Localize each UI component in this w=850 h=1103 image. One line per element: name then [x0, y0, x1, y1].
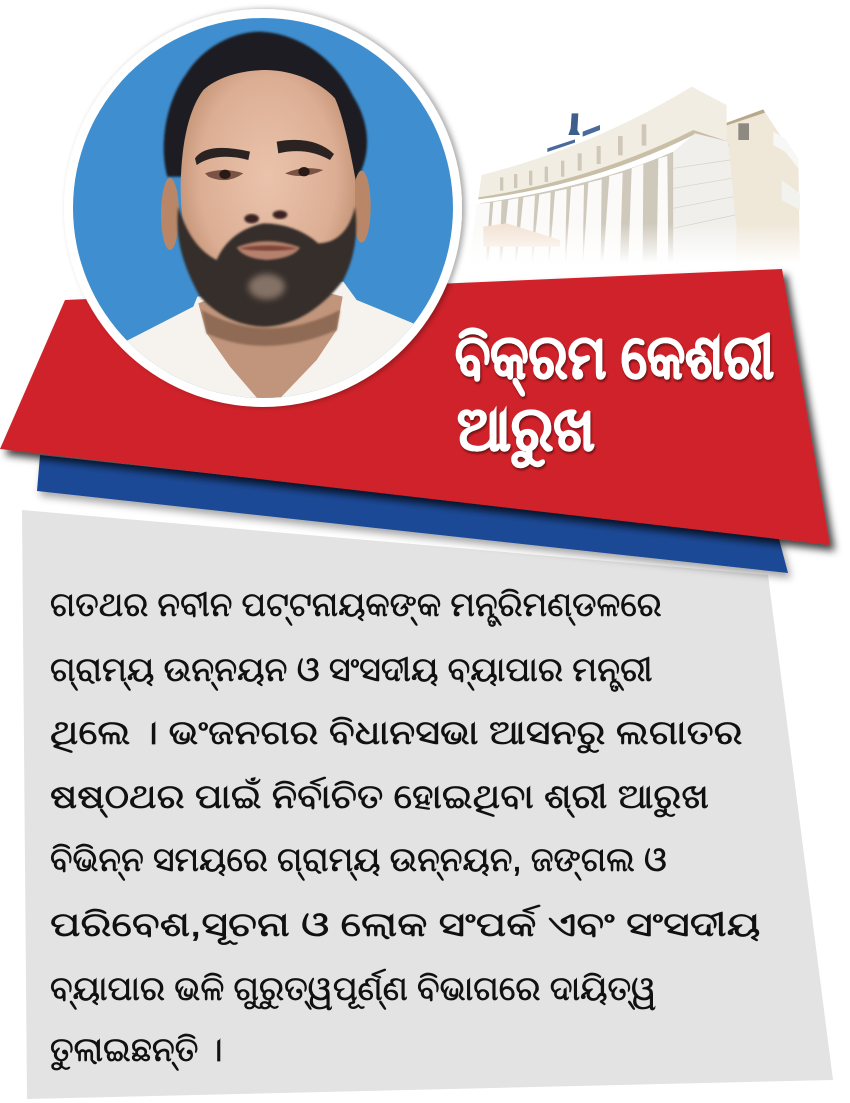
chin highlight: [248, 274, 285, 299]
neck shadow: [202, 310, 340, 346]
red banner: [0, 269, 830, 545]
lip line: [238, 245, 298, 251]
body text: ପରିବେଶ,ସୂଚନା ଓ ଲୋକ ସଂପର୍କ ଏବଂ ସଂସଦୀୟ: [50, 904, 760, 946]
portrait background: [73, 18, 453, 398]
columns: [470, 156, 668, 262]
lower recess: [473, 152, 673, 263]
nostrils: [244, 214, 259, 223]
grey text panel: [22, 510, 833, 1099]
right wing: [725, 109, 800, 267]
name heading: [455, 323, 774, 469]
body text: ବ୍ୟାପାର ଭଳି ଗୁରୁତ୍ୱପୂର୍ଣ୍ଣ ବିଭାଗରେ ଦାୟିତ୍ୱ: [50, 969, 656, 1010]
face: [180, 70, 355, 261]
ears: [161, 178, 179, 250]
name heading: ଆରୁଖ: [457, 395, 595, 469]
name heading: ବିକ୍ରମ କେଶରୀ: [455, 323, 774, 396]
body text: ଥିଲେ । ଭଂଜନଗର ବିଧାନସଭା ଆସନରୁ ଲଗାତର: [50, 713, 742, 754]
body text: ଗ୍ରାମ୍ୟ ଉନ୍ନୟନ ଓ ସଂସଦୀୟ ବ୍ୟାପାର ମନ୍ତ୍ରୀ: [50, 652, 653, 692]
body text: ଗତଥର ନବୀନ ପଟ୍ଟନାୟକଙ୍କ ମନ୍ତ୍ରିମଣ୍ଡଳରେ: [50, 587, 662, 627]
body text: ଷଷ୍ଠଥର ପାଇଁ ନିର୍ବାଚିତ ହୋଇଥିବା ଶ୍ରୀ ଆରୁଖ: [50, 777, 709, 819]
body text: ବିଭିନ୍ନ ସମୟରେ ଗ୍ରାମ୍ୟ ଉନ୍ନୟନ, ଜଙ୍ଗଲ ଓ: [50, 842, 667, 880]
logo and sign: [568, 113, 580, 135]
neck: [198, 294, 343, 398]
mouth: [237, 241, 300, 260]
shirt: [127, 282, 414, 398]
body text: ତୁଲାଇଛନ୍ତି ।: [50, 1032, 223, 1071]
windows: [500, 124, 646, 191]
building illustration: [460, 87, 810, 270]
eyebrows: [195, 140, 334, 165]
hair back: [164, 32, 367, 178]
tower block: [673, 133, 737, 267]
body text: [50, 587, 760, 1071]
portrait: [60, 9, 470, 410]
blue ribbon: [37, 455, 788, 573]
upper facade: [478, 87, 727, 197]
beard: [178, 207, 356, 327]
eyes: [205, 168, 323, 180]
